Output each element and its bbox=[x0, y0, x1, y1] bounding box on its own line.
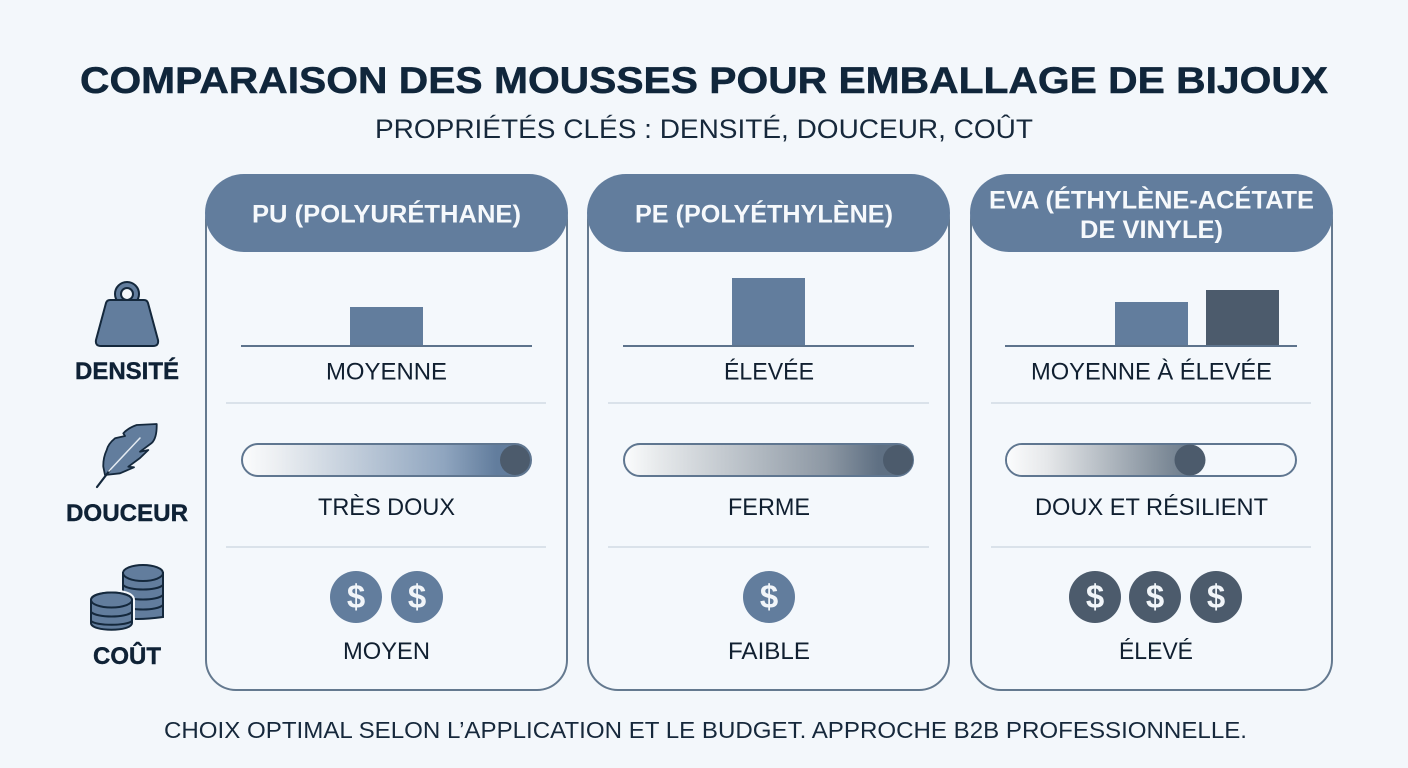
header: PU bbox=[205, 174, 568, 252]
header: PE bbox=[587, 174, 950, 252]
panel: PE bbox=[587, 174, 950, 690]
density value: PU: MOYENNE bbox=[326, 358, 447, 386]
label: coût: COÛT bbox=[93, 642, 161, 670]
softness slider: PE bbox=[624, 444, 913, 476]
cost coins: EVA bbox=[1069, 571, 1242, 623]
header: EVA: DE VINYLE) bbox=[1080, 216, 1223, 244]
cost coins: EVA: $ bbox=[1086, 578, 1104, 615]
header: EVA: EVA (ÉTHYLÈNE-ACÉTATE bbox=[989, 186, 1314, 214]
softness slider: PU bbox=[242, 444, 531, 476]
cost coins: PU: $ bbox=[408, 578, 426, 615]
density bar chart: PE bbox=[623, 278, 914, 346]
icon: coin stacks bbox=[91, 565, 163, 630]
softness value: PU: TRÈS DOUX bbox=[318, 494, 455, 521]
panel: PU bbox=[205, 174, 568, 690]
row labels: properties bbox=[66, 282, 188, 670]
icon: weight bbox=[96, 282, 158, 346]
cost coins: PU bbox=[330, 571, 443, 623]
title: COMPARAISON DES MOUSSES POUR EMBALLAGE DE BIJOUX bbox=[80, 60, 1328, 101]
density value: PE: ÉLEVÉE bbox=[724, 358, 814, 386]
softness value: PE: FERME bbox=[728, 494, 810, 521]
label: douceur: DOUCEUR bbox=[66, 500, 188, 527]
header: PE: PE (POLYÉTHYLÈNE) bbox=[635, 200, 893, 228]
softness slider: EVA bbox=[1006, 444, 1296, 476]
cost value: PU: MOYEN bbox=[343, 638, 430, 665]
subtitle: PROPRIÉTÉS CLÉS : DENSITÉ, DOUCEUR, COÛT bbox=[375, 113, 1033, 144]
cost coins: EVA: $ bbox=[1146, 578, 1164, 615]
panel: EVA bbox=[970, 174, 1333, 690]
density value: EVA: MOYENNE À ÉLEVÉE bbox=[1031, 358, 1272, 386]
cost value: PE: FAIBLE bbox=[728, 638, 810, 665]
footer note: CHOIX OPTIMAL SELON L’APPLICATION ET LE BUDGET. APPROCHE B2B PROFESSIONNELLE. bbox=[164, 717, 1247, 743]
cost coins: EVA: $ bbox=[1207, 578, 1225, 615]
density bar chart: EVA bbox=[1005, 290, 1297, 346]
header: PU: PU (POLYURÉTHANE) bbox=[252, 200, 521, 228]
cost value: EVA: ÉLEVÉ bbox=[1119, 638, 1193, 665]
label: densité: DENSITÉ bbox=[75, 357, 179, 385]
density bar chart: PU bbox=[241, 307, 532, 346]
cost coins: PU: $ bbox=[347, 578, 365, 615]
softness value: EVA: DOUX ET RÉSILIENT bbox=[1035, 494, 1268, 521]
cost coin: PE bbox=[743, 571, 795, 623]
icon: feather bbox=[97, 424, 157, 487]
header: EVA bbox=[970, 174, 1333, 252]
cost coin: PE: $ bbox=[760, 578, 778, 615]
